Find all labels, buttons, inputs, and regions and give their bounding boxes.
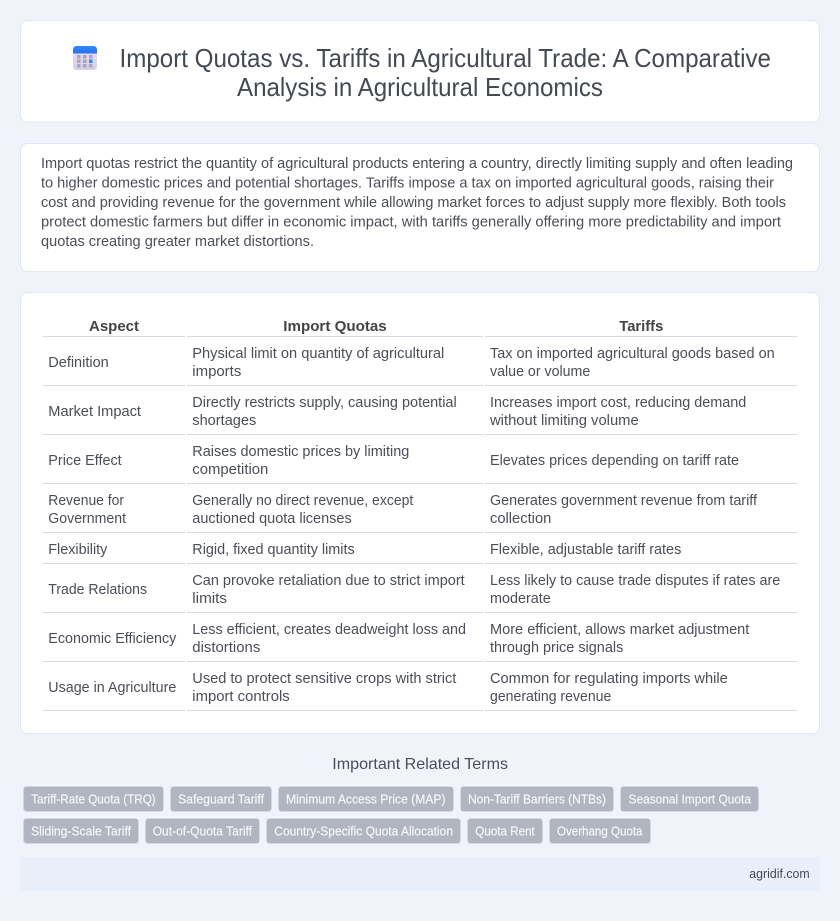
table: comparison xyxy=(43,318,797,711)
table header row: Aspect xyxy=(89,318,139,335)
panel: comparison table card xyxy=(20,292,820,734)
row: flexibility: Flexibility xyxy=(48,542,108,558)
row: usage in agriculture: Used to protect sensitive crops with strict xyxy=(192,671,456,687)
row: trade relations: Trade Relations xyxy=(48,582,147,598)
footer: agridif.com xyxy=(749,866,810,881)
row: usage in agriculture: generating revenue xyxy=(490,689,611,705)
related term tags: Quota Rent xyxy=(475,823,535,838)
row: usage in agriculture xyxy=(48,671,728,705)
row: flexibility: Flexible, adjustable tariff rates xyxy=(490,542,681,558)
related term tags: Non-Tariff Barriers (NTBs) xyxy=(468,791,606,806)
row: economic efficiency: Less efficient, creates deadweight loss and xyxy=(192,622,466,638)
row: economic efficiency: distortions xyxy=(192,640,260,656)
related term tags: Seasonal Import Quota xyxy=(628,791,752,806)
text block: summary paragraph: cost and providing revenue for the government while allowing market forces to adjust supply more flexibly. Both tools xyxy=(41,195,786,211)
related term tags: Minimum Access Price (MAP) xyxy=(286,791,446,806)
related term tags: Overhang Quota xyxy=(557,823,643,838)
row: definition: value or volume xyxy=(490,364,590,380)
text block: summary paragraph: quotas creating greater market distortions. xyxy=(41,234,314,250)
panel: header card xyxy=(20,20,820,122)
related term tags: Safeguard Tariff xyxy=(178,791,264,806)
row: flexibility xyxy=(48,542,681,558)
text block: summary paragraph: to higher domestic prices and potential shortages. Tariffs impose a tax on imported agricultural goods, raising their xyxy=(41,176,774,192)
row: economic efficiency: More efficient, allows market adjustment xyxy=(490,622,749,638)
row: market impact: Increases import cost, reducing demand xyxy=(490,395,746,411)
row: definition: Tax on imported agricultural goods based on xyxy=(490,346,775,362)
row: trade relations xyxy=(48,573,780,607)
text block: summary paragraph: Import quotas restrict the quantity of agricultural products entering a country, directly limiting supply and often leading xyxy=(41,156,793,172)
row: market impact: shortages xyxy=(192,413,256,429)
icon: calendar xyxy=(73,46,97,70)
title: Import Quotas vs. Tariffs in Agricultural Trade: A Comparative xyxy=(120,45,771,73)
row: definition: imports xyxy=(192,364,241,380)
related term tags: Country-Specific Quota Allocation xyxy=(274,823,453,838)
row: usage in agriculture: Usage in Agriculture xyxy=(48,680,176,696)
heading: important related terms: Important Related Terms xyxy=(332,756,508,773)
row: market impact: Market Impact xyxy=(48,404,141,420)
row: definition xyxy=(48,346,775,380)
row: revenue for government: auctioned quota licenses xyxy=(192,511,352,527)
row: definition: Physical limit on quantity of agricultural xyxy=(192,346,444,362)
row: market impact: Directly restricts supply, causing potential xyxy=(192,395,457,411)
row: market impact xyxy=(48,395,746,429)
row: revenue for government: collection xyxy=(490,511,551,527)
row: economic efficiency: through price signals xyxy=(490,640,623,656)
row: usage in agriculture: Common for regulating imports while xyxy=(490,671,728,687)
row: trade relations: limits xyxy=(192,591,227,607)
related term tags xyxy=(24,786,758,844)
row: flexibility: Rigid, fixed quantity limits xyxy=(192,542,355,558)
row: trade relations: moderate xyxy=(490,591,551,607)
row: price effect xyxy=(48,444,739,478)
row: price effect: Price Effect xyxy=(48,453,122,469)
title: Analysis in Agricultural Economics xyxy=(237,74,603,102)
row: price effect: Raises domestic prices by limiting xyxy=(192,444,409,460)
row: revenue for government: Government xyxy=(48,511,126,527)
row: economic efficiency xyxy=(48,622,749,656)
related term tags: Sliding-Scale Tariff xyxy=(31,823,131,838)
row: economic efficiency: Economic Efficiency xyxy=(48,631,177,647)
table header row: Tariffs xyxy=(619,318,663,335)
title xyxy=(120,45,771,102)
row: usage in agriculture: import controls xyxy=(192,689,290,705)
row: market impact: without limiting volume xyxy=(489,413,639,429)
related term tags: Out-of-Quota Tariff xyxy=(153,823,252,838)
row: revenue for government: Generally no direct revenue, except xyxy=(192,493,413,509)
table header row: Import Quotas xyxy=(283,318,387,335)
related term tags: Tariff-Rate Quota (TRQ) xyxy=(31,791,156,806)
row: trade relations: Can provoke retaliation due to strict import xyxy=(192,573,465,589)
panel: summary card xyxy=(20,144,820,272)
text block: summary paragraph xyxy=(41,156,793,250)
row: price effect: Elevates prices depending on tariff rate xyxy=(490,453,739,469)
row: price effect: competition xyxy=(192,462,268,478)
row: definition: Definition xyxy=(48,355,109,371)
row: revenue for government: Revenue for xyxy=(48,493,124,509)
row: revenue for government xyxy=(48,493,758,527)
footer xyxy=(20,857,820,891)
row: revenue for government: Generates government revenue from tariff xyxy=(490,493,758,509)
text block: summary paragraph: protect domestic farmers but differ in economic impact, with tariffs generally offering more predictability and import xyxy=(41,214,781,230)
table header row xyxy=(89,318,663,335)
row: trade relations: Less likely to cause trade disputes if rates are xyxy=(490,573,780,589)
